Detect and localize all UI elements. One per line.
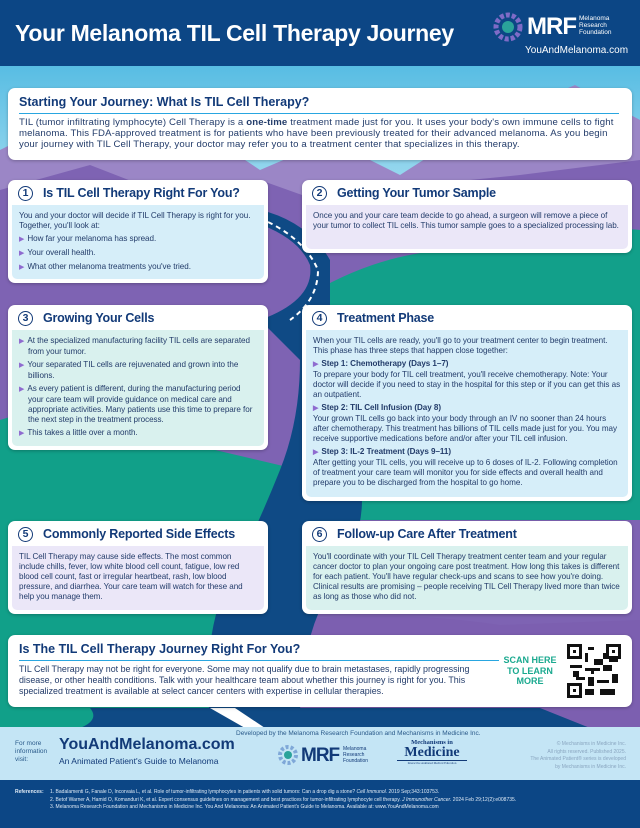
logo: MRF: Foundation: [579, 29, 612, 36]
for more info: For more: [15, 740, 41, 747]
card 5: 5: [23, 528, 28, 540]
footer band: [0, 727, 640, 780]
footer band: An Animated Patient's Guide to Melanoma: [59, 756, 218, 766]
MRF logo footer: MRF: [301, 745, 339, 766]
card 4: ▶ Step 3: IL-2 Treatment (Days 9–11): [313, 447, 451, 456]
card 4: ▶ Step 1: Chemotherapy (Days 1–7): [313, 359, 448, 368]
for more info: [15, 740, 47, 763]
references: References:: [15, 789, 44, 795]
copyright: © Mechanisms in Medicine Inc.: [557, 741, 626, 747]
card 2: Once you and your care team decide to go ahead, a surgeon will remove a piece of your tumor to collect TIL cells. This tumor sample goes to a specialized processing lab.: [313, 211, 619, 230]
card 4: ▶ Step 2: TIL Cell Infusion (Day 8): [313, 403, 441, 412]
card 1: Is TIL Cell Therapy Right For You?: [43, 186, 240, 200]
site name: YouAndMelanoma.com: [59, 736, 235, 753]
for more info: information: [15, 748, 47, 755]
card 4: Treatment Phase: [337, 311, 434, 325]
logo: MRF: YouAndMelanoma.com: [525, 45, 628, 56]
card 2: Getting Your Tumor Sample: [337, 186, 496, 200]
for more info: visit:: [15, 756, 28, 763]
card 5: [8, 521, 268, 614]
logo: MRF: Melanoma: [579, 15, 609, 22]
references: 2. Betof Warner A, Hamid O, Komanduri K, et al. Expert consensus guidelines on management and best practices for tumor-infiltrating lymphocyte cell therapy. J Immunother Cancer. 2024 Feb 29;12(2):e008735.: [50, 796, 516, 802]
card 1: ▶ How far your melanoma has spread.: [19, 234, 156, 243]
copyright: [530, 741, 626, 770]
card 4: When your TIL cells are ready, you'll go to your treatment center to begin treatment. This phase has three steps that happen close together:: [313, 336, 608, 355]
card 1: ▶ Your overall health.: [19, 248, 95, 257]
Mechanisms in Medicine logo: [397, 739, 467, 765]
MRF logo footer: Melanoma: [343, 746, 366, 752]
card 1: [8, 180, 268, 283]
logo: MRF: [494, 12, 628, 56]
card 6: You'll coordinate with your TIL Cell Therapy treatment center team and your regular cancer doctor to plan your ongoing care post treatment. How long this takes is different for each patient. You'll have regular check-ups and scans to see how you're doing. Clinical results are promising – people receiving TIL Cell Therapy lived more than twice as long as those who did not.: [313, 552, 620, 601]
logo: MRF: MRF: [527, 13, 576, 40]
card 1: 1: [23, 187, 28, 199]
copyright: The Animated Patient® series is developed: [530, 756, 626, 762]
intro card: [8, 88, 632, 160]
MRF logo footer: [278, 745, 368, 766]
Mechanisms in Medicine logo: Medicine: [404, 745, 460, 760]
card 4: 4: [317, 312, 322, 324]
MRF logo footer: Research: [343, 752, 364, 758]
card 4: [302, 305, 632, 501]
card 6: Follow-up Care After Treatment: [337, 527, 517, 541]
card 3: [8, 305, 268, 450]
developed by: Developed by the Melanoma Research Foundation and Mechanisms in Medicine Inc.: [236, 730, 481, 737]
card 3: ▶ This takes a little over a month.: [19, 428, 138, 437]
card 4: Your grown TIL cells go back into your body through an IV no sooner than 24 hours after chemotherapy. This treatment has billions of TIL cells made just for you. You may receive supportive medications before and/or after your TIL cell infusion.: [313, 414, 617, 443]
title: Your Melanoma TIL Cell Therapy Journey: [15, 20, 454, 46]
card 3: ▶ At the specialized manufacturing facility TIL cells are separated from your tumor.: [19, 336, 250, 356]
scan label: SCAN HERE TO LEARN MORE: [503, 655, 556, 686]
Mechanisms in Medicine logo: Interactive Animated Medical Education: [408, 761, 456, 765]
logo: MRF: Research: [579, 22, 607, 29]
card 4: To prepare your body for TIL cell treatment, you'll receive chemotherapy. Note: Your doctor will decide if you need to stay in the hospital for this step or if you can get this as an outpatient.: [313, 370, 620, 399]
card 5: Commonly Reported Side Effects: [43, 527, 235, 541]
copyright: All rights reserved. Published 2025.: [547, 748, 626, 754]
card 3: ▶ As every patient is different, during the manufacturing period your care team will provide guidance on medical care and appropriate activities. Many patients use this time to prepare for the next step in the treatment process.: [19, 384, 252, 424]
final card: [8, 635, 632, 707]
references: 3. Melanoma Research Foundation and Mechanisms in Medicine Inc. You And Melanoma: An Animated Patient's Guide to Melanoma. Available at: www.YouAndMelanoma.com: [50, 804, 439, 810]
card 3: ▶ Your separated TIL cells are rejuvenated and grown into the billions.: [19, 360, 238, 380]
card 4: After getting your TIL cells, you will receive up to 6 doses of IL-2. Following completion of treatment your care team will monitor you for side effects and overall health and prepare you to be discharged from the hospital to go home.: [313, 458, 618, 487]
card 3: Growing Your Cells: [43, 311, 154, 325]
card 3: 3: [23, 312, 28, 324]
QR code: [567, 644, 621, 698]
final card: TIL Cell Therapy may not be right for everyone. Some may not qualify due to brain metastases, rapidly progressing disease, or other health conditions. Talk with your healthcare team about whether this journey is right for you. This specialized treatment is available at select cancer centers with expertise in cellular therapies.: [19, 664, 469, 696]
intro card: Starting Your Journey: What Is TIL Cell Therapy?: [19, 95, 309, 109]
card 1: ▶ What other melanoma treatments you've tried.: [19, 262, 191, 271]
road: [208, 212, 362, 720]
card 1: You and your doctor will decide if TIL Cell Therapy is right for you. Together, you'll look at:: [19, 211, 250, 230]
references: [0, 780, 640, 828]
copyright: by Mechanisms in Medicine Inc.: [555, 764, 626, 770]
MRF logo footer: Foundation: [343, 758, 368, 764]
references: 1. Badalamenti G, Fanale D, Incorvaia L, et al. Role of tumor-infiltrating lymphocytes in patients with solid tumors: Can a drop dig a stone? Cell Immunol. 2019 Sep;343:103753.: [50, 789, 439, 795]
card 2: 2: [317, 187, 322, 199]
card 6: 6: [317, 528, 322, 540]
final card: Is The TIL Cell Therapy Journey Right For You?: [19, 642, 300, 656]
card 2: [302, 180, 632, 253]
card 5: TIL Cell Therapy may cause side effects. The most common include chills, fever, low white blood cell count, fatigue, low red blood cell count, fast or irregular heartbeat, rash, low blood pressure, and diarrhea. Your care team will watch for these and help you manage them.: [19, 552, 243, 601]
intro card: TIL (tumor infiltrating lymphocyte) Cell Therapy is a one-time treatment made just for you. It uses your body's own immune cells to fight melanoma. This FDA-approved treatment is for patients who have been previously treated for their advanced melanoma. As you begin your journey with TIL Cell Therapy, your doctor may refer you to a treatment center that specializes in this therapy.: [19, 117, 614, 150]
card 6: [302, 521, 632, 614]
header: [0, 0, 640, 66]
Mechanisms in Medicine logo: Mechanisms in: [411, 739, 453, 746]
